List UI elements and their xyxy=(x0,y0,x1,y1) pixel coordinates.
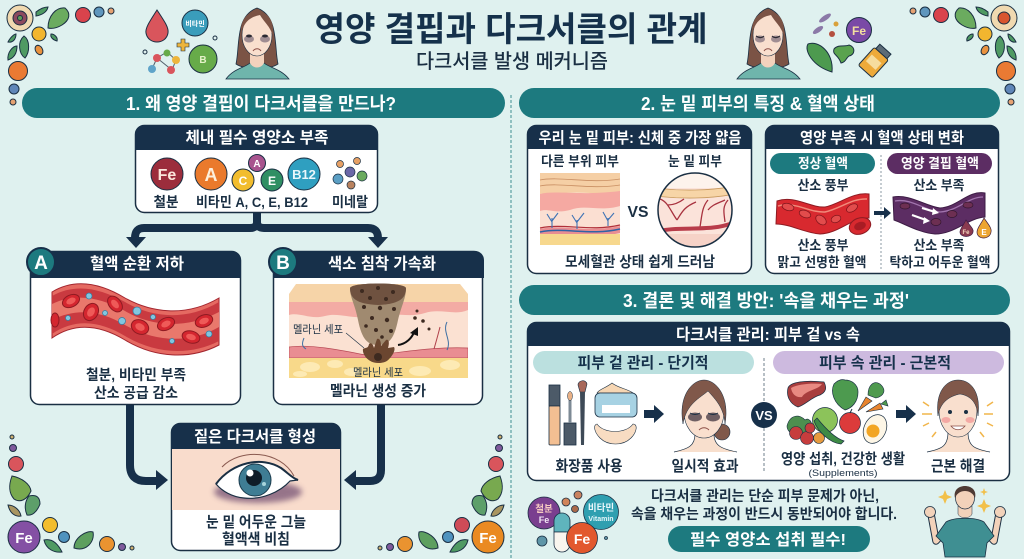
icon: VS badge: VS xyxy=(755,408,773,423)
panel: deep dark circles: 눈 밑 어두운 그늘 xyxy=(206,514,306,531)
panel: essential nutrients: A xyxy=(204,165,218,185)
arrow: cosmetics to effect xyxy=(644,405,664,423)
callout: essential nutrients xyxy=(668,526,870,552)
label: deficient blood xyxy=(887,153,992,174)
panel: dark circle care: 화장품 사용 xyxy=(556,458,623,475)
decoration: bottom-left corner nutrients: Fe xyxy=(15,530,33,547)
illustration: skin cross section with melanin: 멜라닌 세포 xyxy=(353,366,403,379)
panel: essential nutrients: Fe xyxy=(158,167,176,184)
panel: essential nutrients: 미네랄 xyxy=(332,194,368,210)
panel: dark circle care: 근본 해결 xyxy=(931,458,985,475)
section header 1: 1. 왜 영양 결핍이 다크서클을 만드나? xyxy=(126,94,396,114)
icon group: foods and supplements right of title: Fe xyxy=(852,24,866,38)
arrow: nutrients branch to A and B xyxy=(126,213,388,248)
panel: blood state change: 영양 부족 시 혈액 상태 변화 xyxy=(800,129,964,147)
section header 2: 2. 눈 밑 피부의 특징 & 혈액 상태 xyxy=(641,94,875,114)
panel: blood state change: 맑고 선명한 혈액 xyxy=(778,254,866,270)
icon group: nutrient icons left of title: 비타민 xyxy=(185,19,205,28)
panel B: pigmentation: 멜라닌 생성 증가 xyxy=(330,383,426,400)
illustration: deficient vessel xyxy=(893,193,991,238)
conclusion text: 속을 채우는 과정이 반드시 동반되어야 합니다. xyxy=(631,506,897,523)
illustration: thin skin circle xyxy=(655,170,735,247)
panel B: pigmentation: B xyxy=(276,253,290,274)
icon: cosmetics xyxy=(549,381,637,445)
panel: essential nutrients: E xyxy=(268,174,276,188)
panel: dark circle care: 다크서클 관리: 피부 겉 vs 속 xyxy=(676,326,860,344)
arrow: B to dark circles xyxy=(344,405,381,490)
icon group: nutrient icons left of title: B xyxy=(199,55,207,66)
subtitle: 다크서클 발생 메커니즘 xyxy=(416,50,608,73)
panel: essential nutrients: 비타민 A, C, E, B12 xyxy=(196,194,308,210)
panel: under-eye skin: VS xyxy=(628,204,649,221)
panel: dark circle care: 영양 섭취, 건강한 생활 xyxy=(781,451,905,468)
illustration: deficient vessel: E xyxy=(981,228,987,237)
section header 3: 3. 결론 및 해결 방안: '속을 채우는 과정' xyxy=(623,291,909,311)
decoration: top-left corner nutrients xyxy=(7,5,114,105)
arrow: foods to result xyxy=(896,405,916,423)
panel: essential nutrients: B12 xyxy=(292,167,316,182)
label: inner care: 피부 속 관리 - 근본적 xyxy=(819,354,951,372)
label: surface care xyxy=(533,351,754,374)
illustration: blood vessel xyxy=(51,284,219,355)
panel A: reduced circulation: A xyxy=(34,253,48,274)
section header 1 xyxy=(22,88,505,118)
icon group: supplements bottom: 철분 xyxy=(535,504,553,515)
icon: healthy foods xyxy=(787,380,891,447)
panel A: reduced circulation: 혈액 순환 저하 xyxy=(90,254,184,273)
decoration: bottom nutrients right of dark circle panel: Fe xyxy=(479,530,497,547)
panel: dark circle care: 일시적 효과 xyxy=(672,458,739,475)
icon group: supplements bottom: Fe xyxy=(574,531,590,547)
panel: essential nutrients xyxy=(135,125,378,212)
panel A: reduced circulation: 철분, 비타민 부족 xyxy=(86,367,186,384)
illustration: skin cross section with melanin xyxy=(289,284,468,379)
illustration: normal skin layers xyxy=(540,173,620,245)
section header 3 xyxy=(519,285,1010,315)
icon group: supplements bottom xyxy=(528,491,618,554)
label: deficient blood: 영양 결핍 혈액 xyxy=(901,155,979,171)
label: normal blood xyxy=(770,153,875,174)
illustration: deficient vessel: Fe xyxy=(962,230,970,236)
label: surface care: 피부 겉 관리 - 단기적 xyxy=(578,354,708,372)
panel: under-eye skin: 다른 부위 피부 xyxy=(541,154,619,169)
panel: deep dark circles: 혈액색 비침 xyxy=(222,531,290,548)
panel: deep dark circles: 짙은 다크서클 형성 xyxy=(194,428,316,446)
panel: blood state change: 산소 풍부 xyxy=(798,238,848,253)
panel: blood state change: 산소 부족 xyxy=(914,178,964,193)
icon group: supplements bottom: Fe xyxy=(539,515,549,525)
decoration: top-right corner nutrients xyxy=(910,5,1017,105)
panel: under-eye skin xyxy=(527,125,752,274)
label: normal blood: 정상 혈액 xyxy=(798,155,848,171)
icon: tired face xyxy=(674,380,737,452)
icon: tired woman left xyxy=(226,8,289,79)
panel B: pigmentation xyxy=(269,248,484,404)
decoration: bottom nutrients right of dark circle panel xyxy=(378,435,504,553)
label: inner care xyxy=(773,351,1004,374)
panel: under-eye skin: 우리 눈 밑 피부: 신체 중 가장 얇음 xyxy=(538,129,742,147)
panel: blood state change: 탁하고 어두운 혈액 xyxy=(890,254,990,270)
panel: dark circle care: (Supplements) xyxy=(808,468,878,479)
panel: under-eye skin: 눈 밑 피부 xyxy=(668,154,722,169)
icon: tired woman right xyxy=(737,8,800,79)
panel: blood state change xyxy=(765,125,999,274)
arrow: healthy to deficient xyxy=(874,207,891,219)
panel: deep dark circles xyxy=(171,423,341,550)
arrow: A to dark circles xyxy=(130,405,168,490)
panel: under-eye skin: 모세혈관 상태 쉽게 드러남 xyxy=(565,254,715,271)
icon: healthy face xyxy=(922,380,993,452)
icon group: foods and supplements right of title xyxy=(807,12,892,78)
section header 2 xyxy=(519,88,1000,118)
panel: dark circle care xyxy=(527,322,1010,480)
panel: essential nutrients: 체내 필수 영양소 부족 xyxy=(186,129,329,147)
panel: blood state change: 산소 풍부 xyxy=(798,178,848,193)
panel A: reduced circulation: 산소 공급 감소 xyxy=(94,385,178,402)
icon: strong man xyxy=(924,486,1006,557)
illustration: skin cross section with melanin: 멜라닌 세포 xyxy=(293,323,343,336)
panel A: reduced circulation xyxy=(27,248,241,404)
panel: blood state change: 산소 부족 xyxy=(914,238,964,253)
panel: essential nutrients: A xyxy=(253,159,261,170)
illustration: eye with shadow xyxy=(214,454,302,503)
conclusion text: 다크서클 관리는 단순 피부 문제가 아닌, xyxy=(651,488,879,505)
icon group: nutrient icons left of title xyxy=(143,10,217,74)
panel B: pigmentation: 색소 침착 가속화 xyxy=(328,255,436,273)
illustration: healthy vessel xyxy=(776,194,873,237)
decoration: bottom-left corner nutrients xyxy=(8,435,134,553)
title: 영양 결핍과 다크서클의 관계 xyxy=(314,11,708,49)
conclusion text xyxy=(631,488,897,523)
icon: VS badge xyxy=(751,402,777,428)
panel: essential nutrients: 철분 xyxy=(154,194,179,210)
icon group: supplements bottom: Vitamin xyxy=(588,516,614,523)
icon group: supplements bottom: 비타민 xyxy=(588,502,614,514)
callout: essential nutrients: 필수 영양소 섭취 필수! xyxy=(690,531,846,549)
panel: essential nutrients: C xyxy=(239,174,248,188)
